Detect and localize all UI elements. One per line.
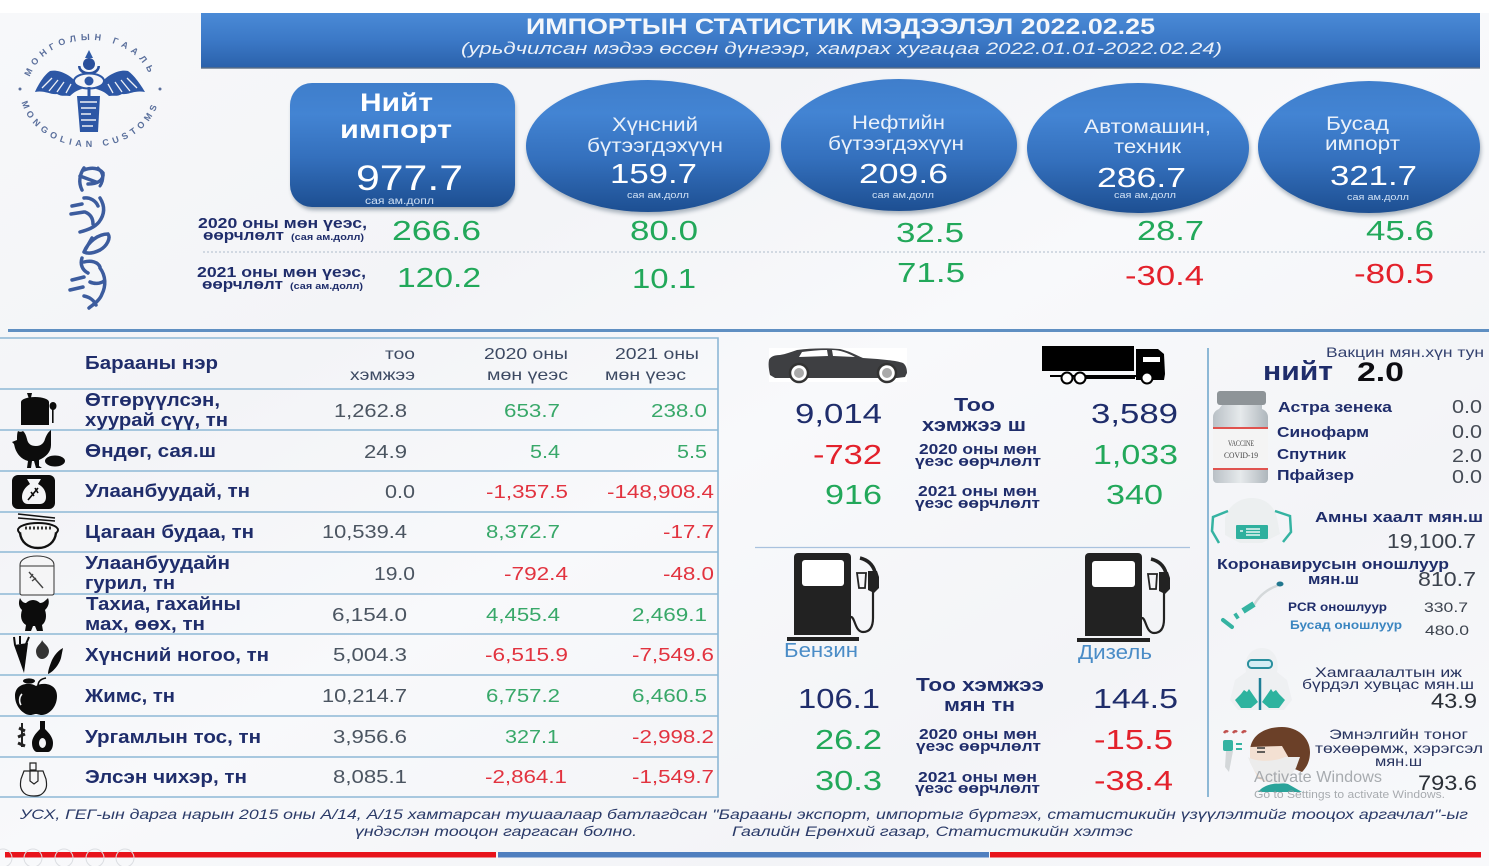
table header: мөн үеэс [487,367,568,384]
row: vegetable oil: 327.1 [505,727,559,747]
comparison row: 2021 change: (сая ам.долл) [290,281,363,291]
row: chicken and fat: мах, өөх, тн [85,614,205,634]
row: eggs: Өндөг, сая.ш [85,441,216,461]
icon: vaccine vial: COVID-19 [1224,451,1258,460]
row: granulated sugar [20,763,714,796]
watermark: activate windows: Activate Windows [1254,769,1382,786]
comparison row: 2020 change: өөрчлөлт [203,227,284,244]
row: dried milk: 653.7 [504,401,560,421]
subtitle: (урьдчилсан мэдээ өссөн дүнгээр, хамрах хугацаа 2022.01.01-2022.02.24) [461,39,1222,58]
panel: food products: сая ам.долл [627,190,689,200]
footnote [19,806,1468,839]
panel: other imports: импорт [1325,134,1400,155]
row: wheat flour: -792.4 [504,564,568,584]
row: rice: -17.7 [663,522,714,542]
panel: medical equipment [1223,726,1483,795]
vehicles figures: 3,589 [1091,398,1178,429]
footnote: Гаалийн Ерөнхий газар, Статистикийн хэлтэс [732,823,1133,839]
comparison row: 2021 change [197,257,1434,294]
panel: total import: сая ам.допл [365,196,434,207]
table: imported goods [0,338,718,797]
table header: тоо [385,346,415,363]
row: chicken and fat: 4,455.4 [486,605,560,625]
panel: medical equipment: мян.ш [1375,753,1422,769]
table header: хэмжээ [350,367,415,384]
row: fruit: Жимс, тн [84,686,175,706]
panel: medical equipment: төхөөрөмж, хэрэгсэл [1315,740,1483,756]
row: wheat flour: гурил, тн [85,573,175,593]
row: vegetable oil [18,721,714,752]
icon: petrol pump [787,553,879,641]
comparison row: 2020 change: 32.5 [896,217,964,248]
footnote: үндэслэн тооцон гаргасан болно. [355,823,637,839]
row: eggs: 5.4 [530,442,560,462]
logo: Mongolian Customs emblem: МОНГОЛЫН ГААЛЬ [24,34,152,76]
row: chicken and fat: 2,469.1 [632,605,707,625]
row: fruit: 6,460.5 [632,686,707,706]
row: vegetables: -6,515.9 [485,645,568,665]
fuel figures: Тоо хэмжээ [916,675,1044,695]
vehicles figures: 340 [1106,479,1163,510]
vehicles figures: -732 [813,439,882,470]
row: chicken and fat: 6,154.0 [332,605,407,625]
panel: total import: импорт [340,116,452,144]
logo: Mongolian Customs emblem [18,34,162,147]
panel: food products: бүтээгдэхүүн [587,136,723,157]
panel: food products: 159.7 [610,158,697,189]
panel: vaccines: Вакцин мян.хүн тун [1326,344,1484,360]
table header: мөн үеэс [605,367,686,384]
panel: face masks: Амны хаалт мян.ш [1315,509,1483,526]
icon: face mask [1212,498,1291,543]
row: wheat: -1,357.5 [486,482,568,502]
row: dried milk: хуурай сүү, тн [85,410,228,430]
panel: coronavirus tests: Бусад оношлуур [1290,620,1402,632]
row: dried milk: Өтгөрүүлсэн, [85,390,220,410]
icon: protective suit [1230,648,1292,710]
comparison row: 2020 change: 2020 оны мөн үеэс, [198,215,367,232]
panel: total import: 977.7 [356,159,463,198]
row: dried milk: 1,262.8 [334,401,407,421]
row: vegetables: 5,004.3 [333,645,407,665]
panel: vaccines: 0.0 [1452,422,1482,442]
logo: Mongolian Customs emblem: MONGOLIAN CUSTOMS [22,100,156,147]
row: dried milk [21,390,707,430]
panel: coronavirus tests: 330.7 [1424,599,1468,615]
row: vegetables [14,636,714,674]
logo: vertical script calligraphy ornament [70,168,109,308]
row: rice [18,514,714,548]
row: rice: 8,372.7 [486,522,560,542]
fuel figures: үеэс өөрчлөлт [916,738,1041,755]
row: granulated sugar: -1,549.7 [632,767,714,787]
panel: vaccines: Пфайзер [1277,467,1354,484]
comparison row: 2021 change: өөрчлөлт [202,276,283,293]
row: vegetable oil: -2,998.2 [632,727,714,747]
panel: food products: Хүнсний [612,115,698,136]
comparison row: 2020 change: 266.6 [392,215,481,246]
panel: vaccines: Спутник [1277,446,1347,463]
panel: petroleum products: сая ам.долл [872,190,934,200]
panel: vaccines: 0.0 [1452,467,1482,487]
row: rice: 10,539.4 [322,522,407,542]
row: wheat flour: Улаанбуудайн [85,553,230,573]
comparison row: 2021 change: 71.5 [897,257,965,288]
diesel label: Дизель [1078,642,1152,664]
panel: coronavirus tests [1217,556,1476,638]
footnote: УСХ, ГЕГ-ын дарга нарын 2015 оны А/14, А/15 хамтарсан тушаалаар батлагдсан "Барааны экспорт, импортыг бүртгэх, статистикийн үзүүлэлтийг тооцох аргачлал"-ыг [19,806,1468,822]
panel: face masks: 19,100.7 [1387,531,1476,553]
panel: protective clothing: 43.9 [1431,690,1477,713]
panel: vaccines: 2.0 [1357,357,1404,387]
icon: diesel pump [1077,553,1170,642]
row: fruit [15,678,707,715]
table header: 2021 оны [615,346,699,363]
panel: coronavirus tests: Коронавирусын оношлуур [1217,556,1449,573]
vehicles figures: 1,033 [1093,439,1178,470]
panel: fuel [784,553,1178,797]
row: wheat flour: 19.0 [374,564,415,584]
panel: coronavirus tests: 810.7 [1418,569,1476,591]
row: granulated sugar: 8,085.1 [333,767,407,787]
row: chicken and fat: Тахиа, гахайны [86,594,241,614]
icon: vaccine vial [1213,391,1268,483]
header banner [201,13,1480,69]
fuel figures: 26.2 [815,724,882,755]
panel: food products [526,80,771,215]
fuel figures: 106.1 [798,683,880,714]
comparison row: 2020 change: 28.7 [1137,215,1204,246]
panel: vehicles count [769,346,1178,512]
panel: other imports: сая ам.долл [1347,192,1409,202]
panel: vehicles and machinery: 286.7 [1097,162,1186,193]
panel: coronavirus tests: мян.ш [1308,571,1359,588]
table header [85,346,699,384]
fuel figures: 2020 оны мөн [919,726,1037,743]
icon: car [769,348,907,382]
icon: test swab [1223,582,1284,627]
vehicles figures: үеэс өөрчлөлт [915,495,1040,512]
fuel figures: 144.5 [1093,683,1178,714]
row: granulated sugar: -2,864.1 [485,767,567,787]
row: eggs: 24.9 [364,442,407,462]
row: rice: Цагаан будаа, тн [85,522,254,542]
row: wheat flour [20,553,714,595]
vehicles figures: 9,014 [795,398,882,429]
row: vegetable oil: 3,956.6 [333,727,407,747]
panel: medical equipment: Эмнэлгийн тоног [1329,726,1468,742]
vehicles figures: үеэс өөрчлөлт [915,453,1041,470]
panel: petroleum products: 209.6 [859,158,948,189]
table header: Барааны нэр [85,353,218,373]
comparison row: 2020 change [198,215,1434,248]
row: eggs: 5.5 [677,442,707,462]
fuel figures: 2021 оны мөн [918,769,1037,786]
title: ИМПОРТЫН СТАТИСТИК МЭДЭЭЛЭЛ 2022.02.25 [526,14,1155,39]
row: fruit: 6,757.2 [486,686,560,706]
panel: vaccines: нийт [1263,356,1333,386]
row: wheat flour: -48.0 [663,564,714,584]
fuel figures: -38.4 [1094,765,1173,796]
row: wheat: 0.0 [385,482,415,502]
fuel figures: үеэс өөрчлөлт [915,780,1040,797]
panel: vehicles and machinery [1027,83,1250,216]
comparison row: 2020 change: 45.6 [1366,215,1434,246]
comparison row: 2021 change: -80.5 [1354,258,1434,289]
comparison row: 2021 change: 120.2 [397,262,481,293]
comparison row: 2020 change: 80.0 [630,215,698,246]
fuel figures: мян тн [944,695,1015,715]
watermark: activate windows: Go to Settings to activate Windows. [1254,789,1445,801]
table header: 2020 оны [484,346,568,363]
vehicles figures: 2020 оны мөн [919,441,1037,458]
panel: protective clothing: бүрдэл хувцас мян.ш [1302,676,1474,692]
faint presentation toolbar [0,849,134,866]
panel: coronavirus tests: 480.0 [1425,622,1469,638]
panel: vaccines: 2.0 [1452,446,1482,466]
row: chicken and fat [19,594,707,634]
panel: petroleum products: Нефтийн [852,113,945,134]
row: vegetable oil: Ургамлын тос, тн [85,727,261,747]
row: vegetables: -7,549.6 [632,645,714,665]
fuel figures: 30.3 [815,765,882,796]
panel: total import [290,83,515,210]
panel: petroleum products: бүтээгдэхүүн [828,134,964,155]
panel: vaccines [1213,344,1484,487]
panel: total import: Нийт [360,89,433,117]
comparison row: 2021 change: 2021 оны мөн үеэс, [197,264,366,281]
panel: vaccines: Астра зенека [1278,399,1393,416]
panel: vaccines: 0.0 [1452,397,1482,417]
row: wheat [12,475,714,509]
comparison row: 2021 change: -30.4 [1125,260,1204,291]
panel: protective clothing [1230,648,1477,713]
panel: other imports: Бусад [1326,114,1389,135]
vehicles figures [795,395,1178,512]
icon: truck [1042,346,1165,384]
panel: other imports [1258,81,1481,216]
panel: vehicles and machinery: сая ам.долл [1114,190,1176,200]
vehicles figures: 2021 оны мөн [918,483,1037,500]
vehicles figures: 916 [825,479,882,510]
panel: protective clothing: Хамгаалалтын иж [1315,664,1463,680]
vehicles figures: Тоо [954,395,995,415]
row: dried milk: 238.0 [651,401,707,421]
fuel figures [798,675,1178,797]
row: vegetables: Хүнсний ногоо, тн [85,645,269,665]
fuel figures: -15.5 [1094,724,1173,755]
vehicles figures: хэмжээ ш [922,415,1026,435]
panel: petroleum products [781,79,1018,214]
bottom colour bar [5,852,1481,858]
icon: vaccine vial: VACCINE [1228,439,1254,448]
comparison row: 2020 change: (сая ам.долл) [291,232,364,242]
panel: other imports: 321.7 [1330,160,1417,191]
row: eggs [12,430,707,468]
watermark: activate windows [1254,769,1445,801]
petrol label: Бензин [784,640,858,662]
panel: coronavirus tests: PCR оношлуур [1288,602,1387,614]
panel: vaccines: Синофарм [1277,424,1369,441]
panel: medical equipment: 793.6 [1418,772,1477,795]
row: wheat: -148,908.4 [607,482,714,502]
comparison row: 2021 change: 10.1 [632,263,696,294]
row: wheat: Улаанбуудай, тн [85,481,250,501]
panel: vehicles and machinery: Автомашин, [1084,117,1211,138]
panel: face masks [1212,498,1483,553]
row: granulated sugar: Элсэн чихэр, тн [85,767,247,787]
icon: doctor with thermometer [1223,727,1310,792]
panel: vehicles and machinery: техник [1114,137,1182,158]
row: fruit: 10,214.7 [322,686,407,706]
